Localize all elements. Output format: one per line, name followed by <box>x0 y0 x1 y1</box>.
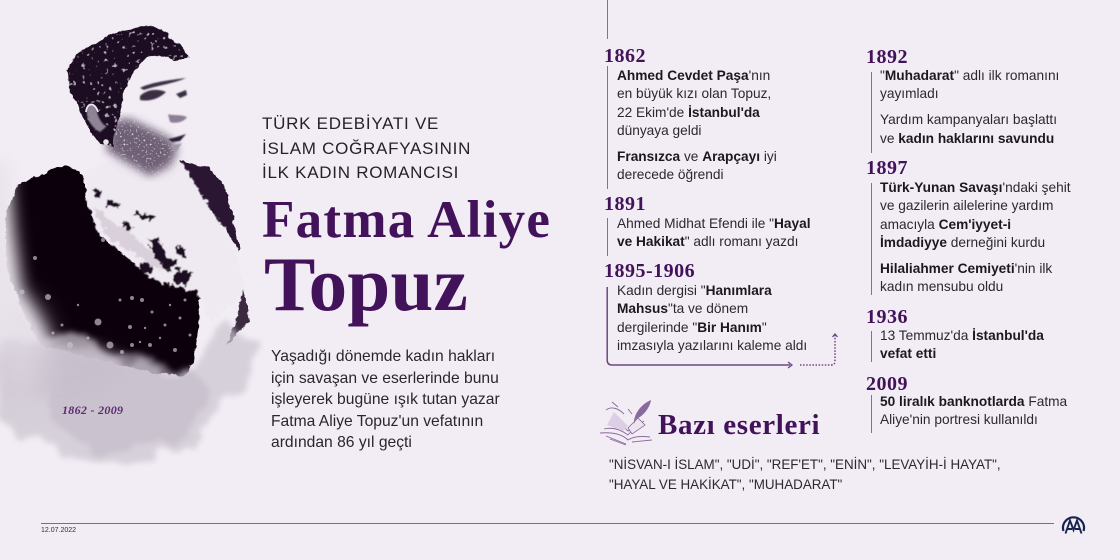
text 1895-1906: Kadın dergisi "Hanımlara <box>617 283 772 298</box>
text 1892 <box>880 68 1059 146</box>
timeline 1895-1906 <box>604 260 838 368</box>
title line: surname: Topuz <box>264 241 468 327</box>
icon: AA logo <box>1062 516 1086 534</box>
text 1897: amacıyla Cem'iyyet-i <box>880 217 1011 232</box>
heading: Bazı eserleri: Bazı eserleri <box>658 409 820 441</box>
rule 1897 <box>870 183 872 295</box>
text 1892: Yardım kampanyaları başlattı <box>880 112 1057 127</box>
subtitle: TÜRK EDEBİYATI VE <box>262 114 439 133</box>
text 1891 <box>617 216 811 249</box>
text 1895-1906 <box>617 283 807 353</box>
rule 1862 <box>606 66 608 189</box>
list of works: "HAYAL VE HAKİKAT", "MUHADARAT" <box>609 477 842 492</box>
text 1895-1906: imzasıyla yazılarını kaleme aldı <box>617 338 807 353</box>
ink wash smoke <box>0 318 255 462</box>
year 1895-1906: 1895-1906 <box>604 260 695 282</box>
text 1862 <box>617 68 777 182</box>
year 2009: 2009 <box>866 373 908 395</box>
timeline 2009 <box>866 373 1068 433</box>
subtitle: İSLAM COĞRAFYASININ <box>262 138 471 158</box>
left fade of dress <box>0 160 50 420</box>
text 1895-1906: Mahsus"ta ve dönem <box>617 301 748 316</box>
intro paragraph: ardından 86 yıl geçti <box>271 434 412 451</box>
text 1936 <box>880 328 1044 361</box>
timeline 1936 <box>866 306 1044 362</box>
rule 1892 <box>870 72 872 153</box>
text 1862: derecede öğrendi <box>617 167 724 182</box>
intro paragraph: Yaşadığı dönemde kadın hakları <box>271 348 495 365</box>
lower right dark edge <box>226 288 250 346</box>
text 1897 <box>880 180 1071 294</box>
title line: first name: Fatma Aliye <box>262 191 551 249</box>
text 1891: Ahmed Midhat Efendi ile "Hayal <box>617 216 811 231</box>
list of works <box>609 456 1001 492</box>
text 2009 <box>880 394 1068 427</box>
rule 1936 <box>870 331 872 362</box>
text 1892: "Muhadarat" adlı ilk romanını <box>880 68 1059 83</box>
timeline 1892 <box>866 46 1059 153</box>
text 1862: 22 Ekim'de İstanbul'da <box>617 105 760 120</box>
text 1891: ve Hakikat" adlı romanı yazdı <box>617 234 798 249</box>
text 1897: ve gazilerin ailelerine yardım <box>880 198 1053 213</box>
hair <box>67 26 190 146</box>
text 1897: Hilaliahmer Cemiyeti'nin ilk <box>880 261 1052 276</box>
text 1897: İmdadiyye derneğini kurdu <box>880 235 1045 250</box>
facial features <box>140 78 187 152</box>
dates under portrait: 1862 - 2009 <box>62 403 123 417</box>
timeline 1897 <box>866 157 1071 295</box>
timeline 1891 <box>604 193 811 256</box>
icon: open book and quill <box>600 400 652 446</box>
lace collar <box>85 160 246 322</box>
timeline 1862 <box>604 45 777 189</box>
text 1936: vefat etti <box>880 346 936 361</box>
portrait with ink wash <box>0 26 262 466</box>
date: 12.07.2022 <box>41 527 76 534</box>
intro paragraph: Fatma Aliye Topuz'un vefatının <box>271 412 483 430</box>
year 1891: 1891 <box>604 193 646 215</box>
text 2009: 50 liralık banknotlarda Fatma <box>880 394 1067 409</box>
footer line <box>41 523 1054 524</box>
timeline top stub <box>606 0 608 39</box>
text 1862: dünyaya geldi <box>617 123 701 138</box>
intro paragraph: için savaşan ve eserlerinde bunu <box>271 370 499 386</box>
text 2009: Aliye'nin portresi kullanıldı <box>880 412 1038 427</box>
speckles on dress <box>20 238 192 354</box>
soft fade under dress <box>0 345 135 395</box>
year 1892: 1892 <box>866 46 908 68</box>
face shading: cheek and neck <box>106 118 178 176</box>
list of works: "NİSVAN-I İSLAM", "UDİ", "REF'ET", "ENİN", "LEVAYİH-İ HAYAT", <box>609 457 1001 472</box>
intro paragraph <box>271 348 500 451</box>
text 1895-1906: dergilerinde "Bir Hanım" <box>617 320 767 335</box>
text 1862: Ahmed Cevdet Paşa'nın <box>617 68 770 83</box>
subtitle <box>262 114 471 182</box>
earring <box>103 139 109 145</box>
arrow continuing the timeline <box>606 287 838 368</box>
text 1862: en büyük kızı olan Topuz, <box>617 86 771 101</box>
text 1936: 13 Temmuz'da İstanbul'da <box>880 328 1044 343</box>
intro paragraph: işleyerek bugüne ışık tutan yazar <box>271 391 500 408</box>
text 1897: kadın mensubu oldu <box>880 279 1003 294</box>
year 1936: 1936 <box>866 306 908 328</box>
text 1892: yayımladı <box>880 86 939 101</box>
rule 2009 <box>870 395 872 433</box>
text 1862: Fransızca ve Arapçayı iyi <box>617 149 777 164</box>
dress: dark right sliver <box>180 160 240 252</box>
text 1897: Türk-Yunan Savaşı'ndaki şehit <box>880 180 1071 195</box>
title <box>262 191 551 327</box>
rule 1891 <box>606 218 608 256</box>
subtitle: İLK KADIN ROMANCISI <box>262 163 459 182</box>
year 1897: 1897 <box>866 157 908 179</box>
ear <box>87 105 106 132</box>
dress: dark body <box>6 167 200 376</box>
text 1892: ve kadın haklarını savundu <box>880 131 1054 146</box>
year 1862: 1862 <box>604 45 646 67</box>
